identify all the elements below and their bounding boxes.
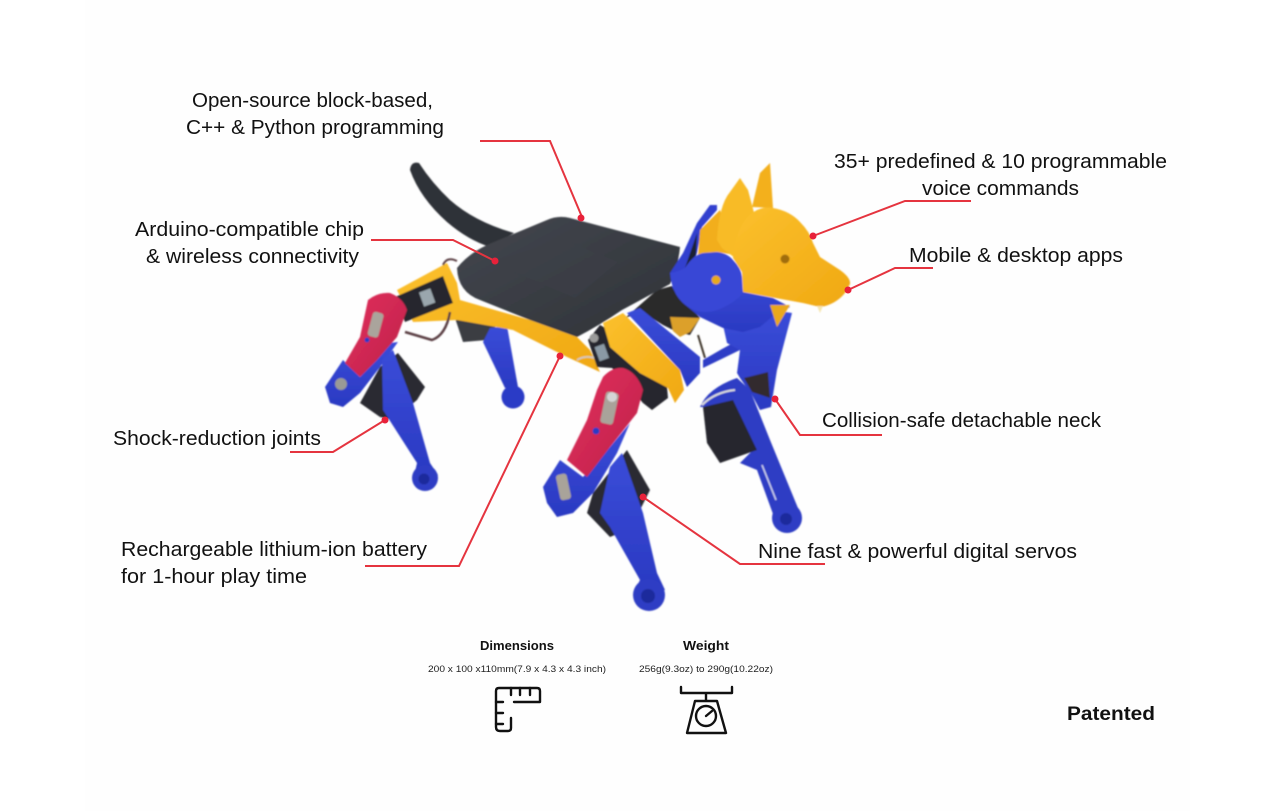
weight block [639, 639, 773, 733]
far ear [752, 163, 773, 208]
head and collar [670, 163, 850, 332]
battery and controller cover [457, 217, 680, 337]
label: voice commands [834, 150, 1167, 200]
label: battery: Rechargeable lithium-ion battery [121, 538, 428, 561]
near ear [717, 178, 756, 258]
callout line: voice commands [810, 201, 971, 240]
label: chip: Arduino-compatible chip [135, 218, 364, 241]
yellow body frame [397, 263, 600, 372]
label: chip: & wireless connectivity [146, 245, 360, 268]
chest [672, 270, 790, 332]
tail [410, 163, 514, 247]
callout line: neck [772, 396, 882, 435]
dimensions block: Dimensions [480, 639, 554, 653]
label: programming: Open-source block-based, [192, 89, 433, 112]
weight block: Weight [683, 639, 730, 653]
collar rear lip [670, 205, 717, 285]
far rear leg [455, 318, 524, 408]
callout line: battery [365, 352, 564, 566]
label: voice commands: 35+ predefined & 10 programmable [834, 150, 1167, 173]
label: servos: Nine fast & powerful digital servos [758, 540, 1077, 563]
callout line: shock joints [290, 416, 388, 452]
label: chip [135, 218, 364, 268]
callout line: programming [480, 141, 584, 222]
yellow neck [698, 210, 735, 256]
label: neck: Collision-safe detachable neck [822, 409, 1102, 432]
label: shock joints: Shock-reduction joints [113, 427, 321, 450]
rear joint servo [395, 259, 457, 340]
callout line: chip [371, 240, 498, 264]
callout line: servos [640, 494, 825, 564]
patented note: Patented [1067, 704, 1155, 725]
icon: ruler [496, 688, 540, 731]
front near leg [543, 368, 665, 611]
dimensions block: 200 x 100 x110mm(7.9 x 4.3 x 4.3 inch) [428, 664, 606, 675]
far front leg with servo [700, 310, 802, 533]
head [733, 207, 850, 307]
label: voice commands: voice commands [922, 177, 1079, 200]
label: battery: for 1-hour play time [121, 565, 307, 588]
weight block: 256g(9.3oz) to 290g(10.22oz) [639, 664, 773, 675]
label: apps: Mobile & desktop apps [909, 244, 1123, 267]
rear near leg [325, 293, 438, 491]
label: battery [121, 538, 428, 588]
robot dog illustration [325, 163, 850, 611]
callout line: apps [844, 268, 933, 294]
collar flap [670, 252, 743, 312]
dimensions block [428, 639, 606, 731]
label: programming [186, 89, 444, 139]
icon: scale [681, 687, 732, 733]
label: programming: C++ & Python programming [186, 116, 444, 139]
front body band [577, 308, 700, 410]
electronics behind collar [625, 286, 705, 358]
